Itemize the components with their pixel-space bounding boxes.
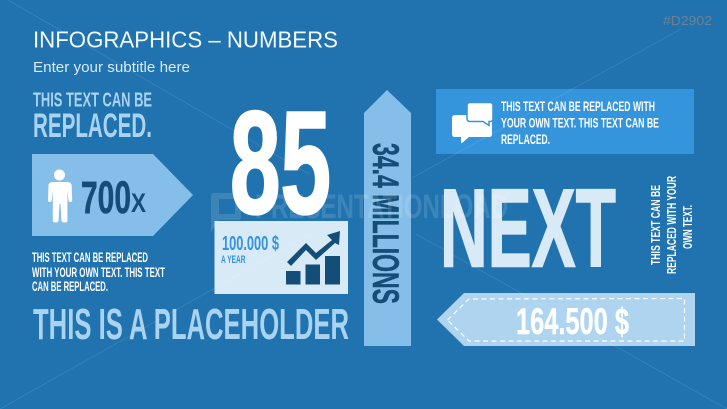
amount: 164.500 $ [516,301,629,342]
caption: A YEAR [221,254,246,266]
arrow panel: 700x [32,154,193,236]
callout text [501,98,659,147]
rotated text block: REPLACED WITH YOUR [664,176,679,274]
heading: this text can be replaced: REPLACED. [33,107,152,145]
big number: 85: 85 [230,81,331,244]
slide code: #D2902 [663,13,712,28]
text block: left body: THIS TEXT CAN BE REPLACED [32,250,148,265]
title: INFOGRAPHICS – NUMBERS [33,26,338,52]
label: 700x: 700 [81,172,131,223]
icon: person [48,170,72,222]
icon: chat bubbles [452,102,493,143]
rotated text block: OWN TEXT. [680,205,695,249]
up arrow panel: 34.4 millions [364,90,411,346]
panel: message callout [436,89,694,154]
heading: this text can be replaced [33,88,152,145]
watermark [211,188,508,232]
text block: left body: CAN BE REPLACED. [32,279,108,294]
panel: yearly amount [214,221,348,294]
arrow panel: 700x: X [131,188,146,218]
heading: this text can be replaced: THIS TEXT CAN BE [33,88,152,112]
amount: 100.000 $ [222,233,279,255]
watermark: PRESENTATIONLOAD [255,188,508,226]
heading: this is a placeholder: THIS IS A PLACEHOLDER [33,300,349,349]
dashed outline [448,298,684,341]
rotated text block: THIS TEXT CAN BE [648,185,663,265]
icon: growth chart [286,231,340,284]
callout text: REPLACED. [501,131,550,147]
text block: left body: WITH YOUR OWN TEXT. THIS TEXT [32,265,165,280]
subtitle: Enter your subtitle here [33,59,190,76]
rotated text block [648,176,695,274]
left arrow panel: 164.500 $ [437,293,695,346]
rotated label: 34.4 MILLIONS [365,143,406,304]
text block: left body [32,250,165,294]
